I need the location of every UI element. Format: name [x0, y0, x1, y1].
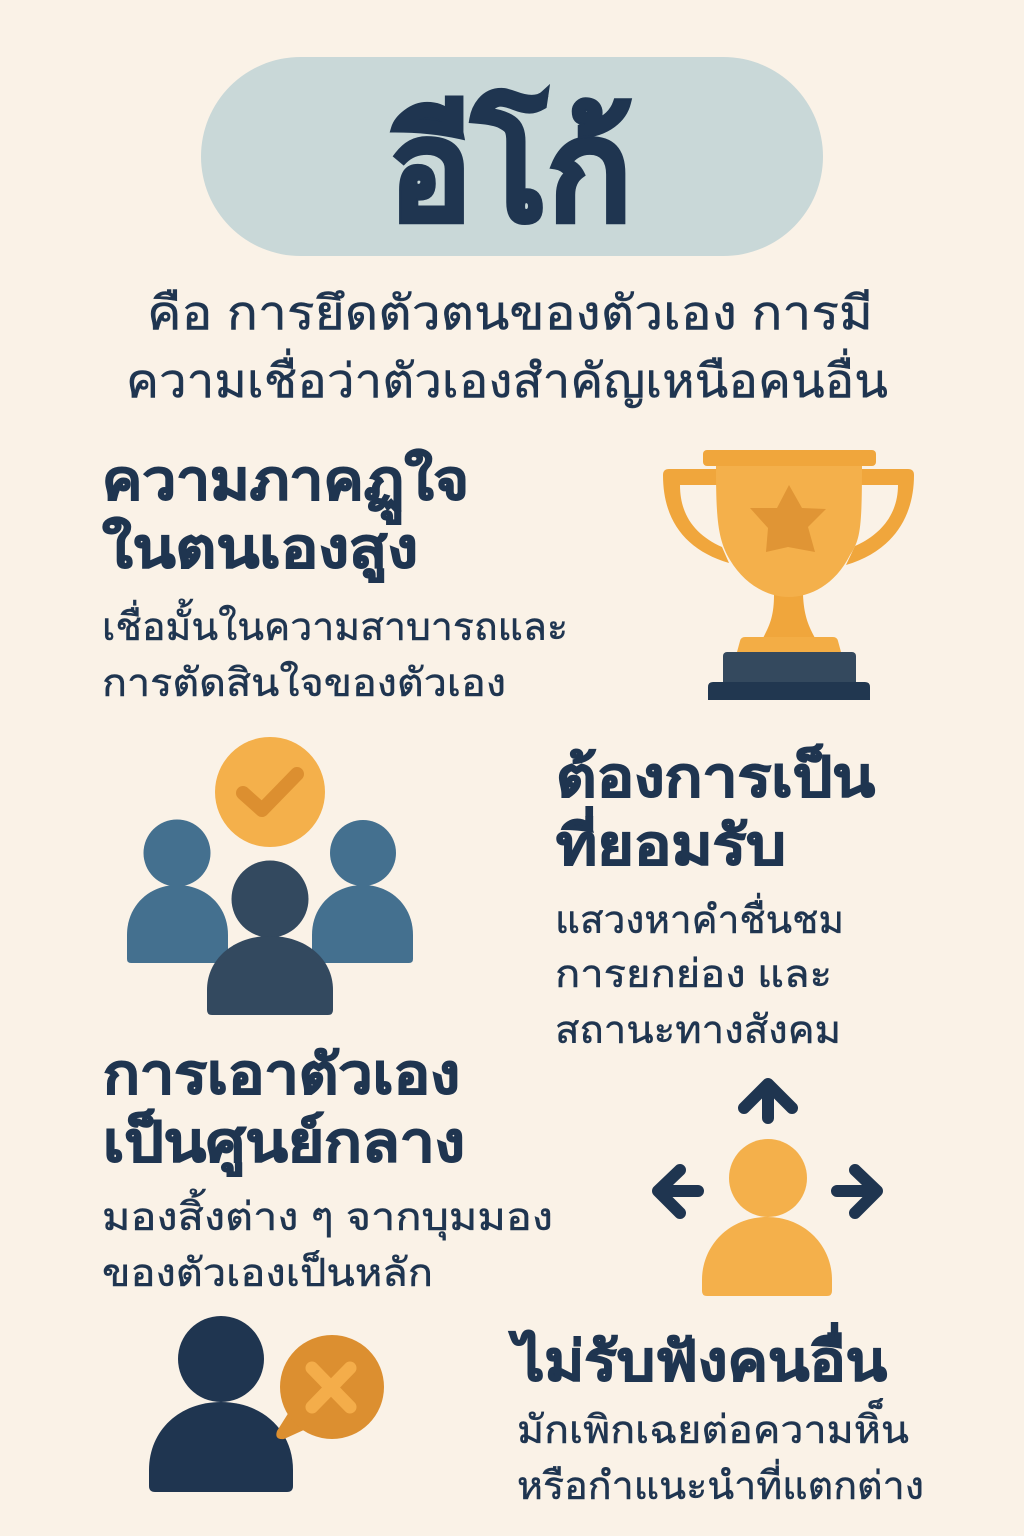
icon: trophy — [663, 450, 914, 700]
section: self-centered text — [102, 1043, 553, 1295]
section: recognition text: ที่ยอมรับ — [556, 806, 786, 876]
section: not listening text — [509, 1322, 924, 1508]
definition text — [126, 286, 888, 408]
section: recognition text: การยกย่อง และ — [555, 953, 832, 996]
section: high self-pride text: การตัดสินใจของตัวเอง — [102, 661, 506, 705]
section: self-centered text: เป็นศูนย์กลาง — [103, 1109, 465, 1177]
definition text: ความเชื่อว่าตัวเองสำคัญเหนือคนอื่น — [126, 348, 888, 408]
icon: group with check — [127, 737, 413, 1015]
section: high self-pride text: ในตนเองสูง — [102, 516, 418, 583]
section: self-centered text: ของตัวเองเป็นหลัก — [102, 1249, 433, 1295]
section: recognition text — [555, 744, 875, 1052]
title pill: อีโก้ — [388, 89, 632, 251]
section: recognition text: สถานะทางสังคม — [555, 1009, 841, 1052]
title pill — [201, 57, 823, 256]
section: high self-pride text: เชื่อมั้นในความสาบารถและ — [102, 598, 568, 649]
section: not listening text: หรือกำแนะนำที่แตกต่าง — [517, 1459, 924, 1508]
definition text: คือ การยึดตัวตนของตัวเอง การมี — [147, 286, 873, 339]
section: high self-pride text: ความภาคฏูใจ — [102, 448, 469, 525]
section: recognition text: แสวงหาคำชื่นชม — [555, 893, 844, 942]
section: high self-pride text — [102, 448, 568, 705]
icon: person with rejected speech bubble — [149, 1316, 384, 1492]
section: recognition text: ต้องการเป็น — [556, 744, 875, 808]
section: not listening text: ไม่รับฟังคนอื่น — [509, 1322, 887, 1392]
section: self-centered text: การเอาตัวเอง — [103, 1043, 460, 1105]
section: self-centered text: มองสิ้งต่าง ๆ จากบุมมอง — [102, 1188, 553, 1241]
section: not listening text: มักเพิกเฉยต่อความหิ็น — [517, 1398, 909, 1452]
icon: person with arrows — [658, 1084, 877, 1296]
